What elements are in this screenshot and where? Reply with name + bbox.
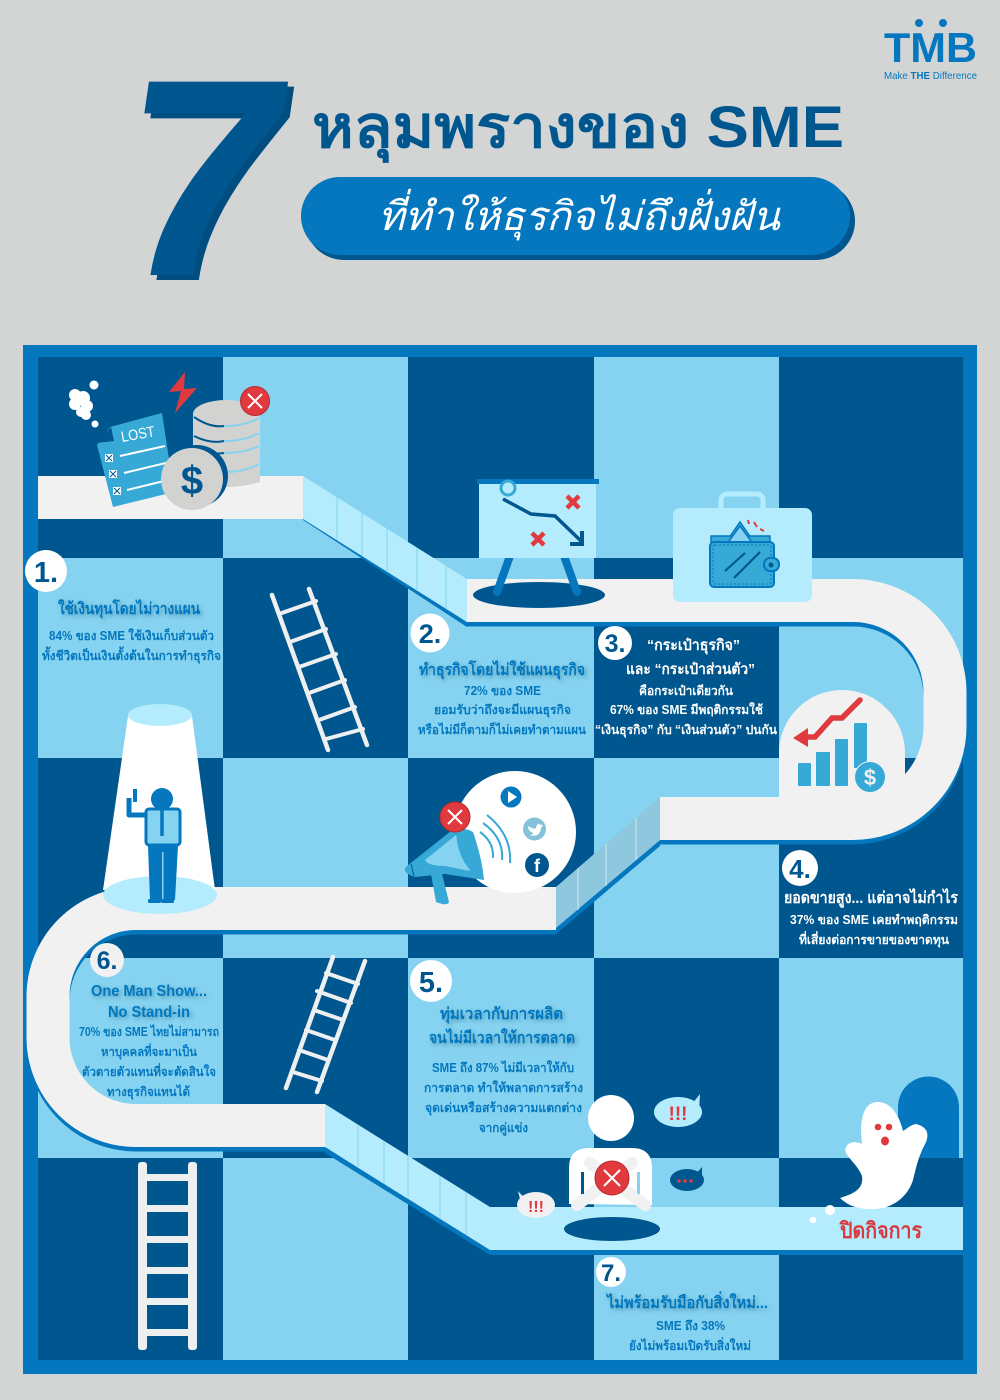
step 2 <box>410 614 586 737</box>
illustration: lost plan and coins <box>69 372 270 510</box>
path: final road <box>490 1207 963 1250</box>
board <box>479 483 596 558</box>
step 6: หาบุคคลที่จะมาเป็น <box>101 1043 197 1060</box>
step 2: ยอมรับว่าถึงจะมีแผนธุรกิจ <box>434 703 571 718</box>
icon: facebook <box>525 853 549 877</box>
ladder: lower <box>138 1162 197 1350</box>
step 2: 2. <box>419 619 441 649</box>
path: stairs 2 <box>556 797 660 928</box>
step 3: 3. <box>605 630 625 658</box>
step 4: ยอดขายสูง... แต่อาจไม่กำไร <box>784 888 958 909</box>
subtitle pill <box>301 177 855 260</box>
title: หลุมพรางของ SME <box>312 95 844 164</box>
step 1: 84% ของ SME ใช้เงินเก็บส่วนตัว <box>49 628 214 643</box>
icon: red cross <box>440 802 470 832</box>
icon: red cross <box>595 1161 629 1195</box>
step 4: 4. <box>789 854 811 884</box>
step 2: ทำธุรกิจโดยไม่ใช้แผนธุรกิจ <box>419 659 585 680</box>
icon: dollar coin <box>161 445 228 510</box>
step 6: ตัวตายตัวแทนที่จะตัดสินใจ <box>82 1063 216 1079</box>
path: right curve <box>467 600 945 818</box>
step 4 <box>782 850 958 948</box>
icon: facebook: f <box>534 856 541 876</box>
big number 7: 7 <box>105 25 316 340</box>
step 3: และ “กระเป๋าส่วนตัว” <box>626 661 755 678</box>
icon: twitter <box>523 818 546 840</box>
step 7: ยังไม่พร้อมเปิดรับสิ่งใหม่ <box>629 1337 751 1353</box>
illustration: megaphone and social bubble <box>405 771 576 904</box>
step 2: 72% ของ SME <box>464 684 541 698</box>
icon: LOST document <box>97 413 174 507</box>
step 6: One Man Show... <box>91 983 207 1000</box>
chart line <box>503 499 581 541</box>
step 5: จุดเด่นหรือสร้างความแตกต่าง <box>425 1101 582 1116</box>
subtitle pill: ที่ทำให้ธุรกิจไม่ถึงฝั่งฝัน <box>378 188 782 241</box>
dollar badge: $ <box>864 765 876 790</box>
step 3: คือกระเป๋าเดียวกัน <box>639 684 733 698</box>
ghost <box>810 1102 927 1223</box>
step 6 <box>79 943 219 1100</box>
step 5: จากคู่แข่ง <box>479 1121 528 1136</box>
shadow hole <box>473 582 605 608</box>
icon: red cross <box>240 386 270 416</box>
step 7: 7. <box>601 1260 621 1287</box>
step 5: จนไม่มีเวลาให้การตลาด <box>429 1028 575 1047</box>
red crosses <box>532 496 579 545</box>
board frame and checker background <box>23 345 977 1374</box>
big number 7: 7 <box>99 20 310 335</box>
step 6: 70% ของ SME ไทยไม่สามารถ <box>79 1024 219 1039</box>
illustration: falling chart on easel <box>473 479 605 608</box>
easel legs <box>497 556 577 592</box>
arrow <box>793 700 860 747</box>
path: start road <box>38 476 303 519</box>
step 6: No Stand-in <box>108 1004 190 1021</box>
icon: play <box>500 786 522 808</box>
step 1: ทั้งชีวิตเป็นเงินตั้งต้นในการทำธุรกิจ <box>42 646 221 664</box>
step 5: การตลาด ทำให้พลาดการสร้าง <box>424 1080 583 1095</box>
step 1: 1. <box>34 557 58 589</box>
icon: dollar coin: $ <box>181 459 203 503</box>
speech bubble: left: !!! <box>528 1199 544 1216</box>
step 3: “เงินธุรกิจ” กับ “เงินส่วนตัว” ปนกัน <box>595 723 777 738</box>
ladder: upper <box>272 589 367 750</box>
illustration: man in spotlight <box>103 704 217 914</box>
illustration: door and ghost <box>810 1076 959 1223</box>
step 3: 67% ของ SME มีพฤติกรรมใช้ <box>610 702 763 717</box>
step 5 <box>410 960 583 1136</box>
ladder: middle <box>286 957 365 1092</box>
step 4: 37% ของ SME เคยทำพฤติกรรม <box>790 913 958 927</box>
icon: megaphone <box>405 827 484 904</box>
step 6: ทางธุรกิจแทนได้ <box>107 1084 190 1100</box>
illustration: person with cross <box>564 1095 660 1241</box>
step 1: ใช้เงินทุนโดยไม่วางแผน <box>58 598 200 619</box>
path shadow edges <box>48 515 963 1255</box>
step 1 <box>25 550 221 664</box>
speech bubble: top: !!! <box>669 1104 687 1125</box>
icon: cloud puff <box>69 380 98 428</box>
step 7: SME ถึง 38% <box>656 1319 725 1333</box>
step 3 <box>595 626 777 738</box>
step 2: หรือไม่มีก็ตามก็ไม่เคยทำตามแผน <box>418 722 586 737</box>
step 4: ที่เสี่ยงต่อการขายของขาดทุน <box>799 931 949 948</box>
step 6: 6. <box>97 947 117 975</box>
person <box>129 788 180 903</box>
step 5: 5. <box>419 967 443 999</box>
logo: TMB: TMB <box>884 24 977 71</box>
path: stairs 1 <box>303 476 467 622</box>
step 5: SME ถึง 87% ไม่มีเวลาให้กับ <box>432 1060 574 1075</box>
end label: ปิดกิจการ <box>839 1218 922 1243</box>
path: stairs 3 <box>325 1104 490 1250</box>
icon: coin stack <box>193 400 260 487</box>
illustration: briefcase with wallet <box>673 494 812 602</box>
step 3: “กระเป๋าธุรกิจ” <box>647 636 740 655</box>
bars <box>798 723 867 786</box>
path: left curve <box>48 908 556 1126</box>
speech bubble: top <box>654 1094 702 1127</box>
speech bubble: left <box>517 1191 555 1218</box>
icon: lightning <box>169 372 197 413</box>
step 7 <box>596 1257 768 1353</box>
icon: wallet <box>710 520 779 587</box>
step 7: ไม่พร้อมรับมือกับสิ่งใหม่... <box>605 1291 768 1312</box>
illustration: sales chart with falling arrow <box>779 690 905 800</box>
speech bubble: dark <box>670 1167 704 1191</box>
step 5: ทุ่มเวลากับการผลิต <box>440 1005 563 1024</box>
logo: TMB: Make THE Difference <box>884 70 977 82</box>
icon: LOST document: LOST <box>120 423 156 446</box>
